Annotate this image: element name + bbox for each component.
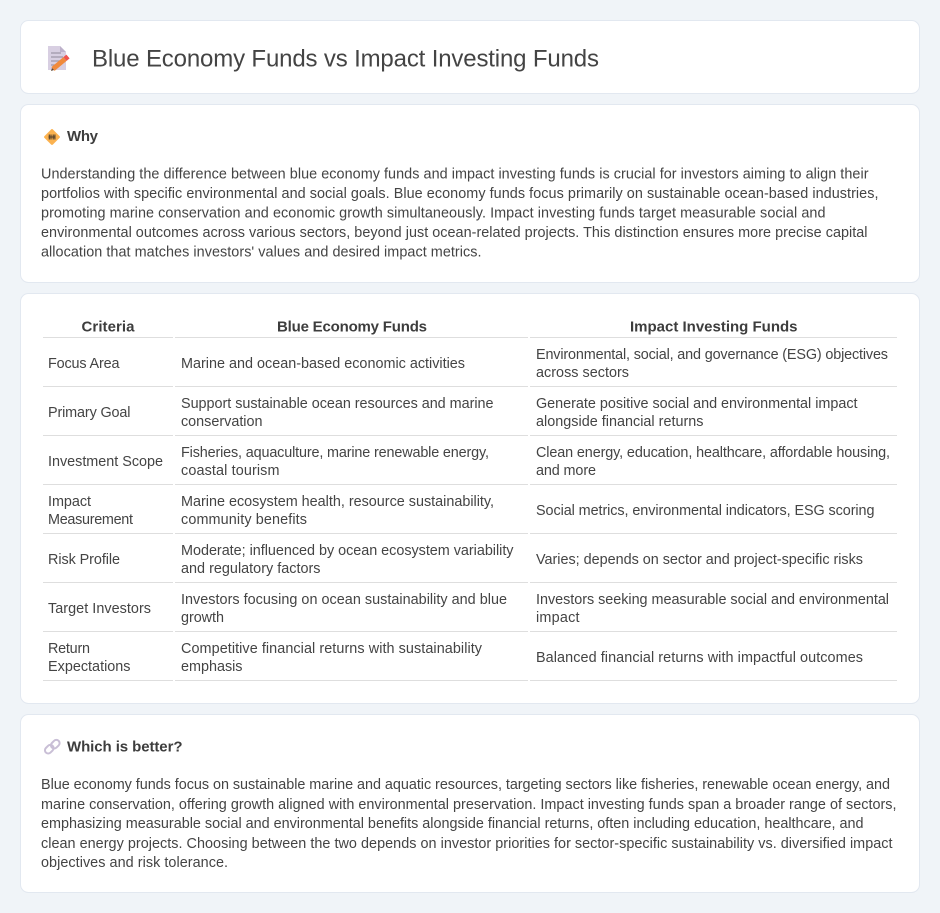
row: primary goal: Primary Goal	[48, 405, 130, 421]
title: Blue Economy Funds vs Impact Investing Funds	[92, 46, 599, 72]
row: focus area: Marine and ocean-based economic activities	[181, 356, 465, 372]
heading: why: Why	[67, 128, 99, 145]
row: primary goal: conservation	[181, 414, 262, 430]
row: investment scope: Investment Scope	[48, 454, 163, 470]
text block: which is better: Blue economy funds focus on sustainable marine and aquatic resources, targeting sectors like fisheries, renewable ocean energy, and	[41, 777, 890, 793]
text block: why: allocation that matches investors' values and desired impact metrics.	[41, 244, 482, 260]
row: return expectations	[43, 641, 897, 681]
table header: Blue Economy Funds	[277, 318, 427, 336]
panel: comparison table	[20, 294, 920, 704]
row: impact measurement: community benefits	[181, 512, 307, 528]
row: target investors: Investors seeking measurable social and environmental	[536, 592, 889, 608]
panel: which is better	[20, 714, 920, 892]
row: risk profile: Moderate; influenced by ocean ecosystem variability	[181, 543, 514, 559]
row: target investors: Target Investors	[48, 601, 151, 617]
row: impact measurement: Impact	[48, 494, 91, 510]
text block: why: portfolios with specific environmental and social goals. Blue economy funds focus primarily on sustainable ocean-based industries,	[41, 186, 878, 202]
row: return expectations: Return	[48, 641, 90, 657]
row: investment scope	[43, 445, 897, 485]
row: target investors: impact	[536, 610, 580, 626]
icon: memo with pencil	[48, 46, 68, 71]
row: return expectations: Balanced financial returns with impactful outcomes	[536, 650, 863, 666]
text block: which is better: emphasizing measurable social and environmental benefits alongside financial returns, often including education, healthcare, and	[41, 816, 864, 832]
row: risk profile	[43, 543, 897, 583]
row: return expectations: Expectations	[48, 659, 130, 675]
panel: why	[20, 104, 920, 282]
table header	[43, 318, 897, 338]
text block: why: promoting marine conservation and economic growth simultaneously. Impact investing funds target measurable social and	[41, 206, 826, 222]
row: primary goal	[43, 396, 897, 436]
row: return expectations: Competitive financial returns with sustainability	[181, 641, 483, 657]
row: focus area: Environmental, social, and governance (ESG) objectives	[536, 347, 888, 363]
heading: which is better: Which is better?	[67, 738, 182, 756]
row: impact measurement: Measurement	[48, 512, 133, 528]
row: primary goal: Support sustainable ocean resources and marine	[181, 396, 494, 412]
row: impact measurement	[43, 494, 897, 534]
row: investment scope: and more	[536, 463, 596, 479]
row: risk profile: Varies; depends on sector and project-specific risks	[536, 552, 863, 568]
row: focus area: Focus Area	[48, 356, 120, 372]
row: primary goal: Generate positive social and environmental impact	[536, 396, 858, 412]
table header: Impact Investing Funds	[630, 318, 798, 336]
row: target investors: growth	[181, 610, 224, 626]
icon: diamond sign	[44, 129, 60, 145]
text block: why: Understanding the difference between blue economy funds and impact investing funds is crucial for investors aiming to align their	[41, 166, 869, 182]
panel: header	[20, 20, 920, 94]
text block: which is better	[41, 777, 896, 871]
row: primary goal: alongside financial returns	[536, 414, 704, 430]
row: investment scope: Clean energy, education, healthcare, affordable housing,	[536, 445, 890, 461]
row: focus area: across sectors	[536, 365, 629, 381]
row: focus area	[43, 347, 897, 387]
text block: why: environmental outcomes across various sectors, beyond just ocean-related projects. This distinction ensures more precise capital	[41, 225, 868, 241]
text block: which is better: clean energy projects. Choosing between the two depends on investor priorities for sector-specific sustainability vs. diversified impact	[41, 836, 892, 852]
row: investment scope: Fisheries, aquaculture, marine renewable energy,	[181, 445, 489, 461]
row: impact measurement: Marine ecosystem health, resource sustainability,	[181, 494, 494, 510]
row: investment scope: coastal tourism	[181, 463, 280, 479]
text block: why	[41, 166, 878, 260]
icon: link	[44, 739, 61, 755]
table header: Criteria	[82, 318, 135, 336]
text block: which is better: marine conservation, offering growth aligned with environmental preservation. Impact investing funds span a broader range of sectors,	[41, 797, 896, 813]
row: target investors	[43, 592, 897, 632]
row: impact measurement: Social metrics, environmental indicators, ESG scoring	[536, 503, 874, 519]
text block: which is better: objectives and risk tolerance.	[41, 855, 228, 871]
row: target investors: Investors focusing on ocean sustainability and blue	[181, 592, 507, 608]
row: risk profile: Risk Profile	[48, 552, 120, 568]
row: return expectations: emphasis	[181, 659, 242, 675]
row: risk profile: and regulatory factors	[181, 561, 320, 577]
